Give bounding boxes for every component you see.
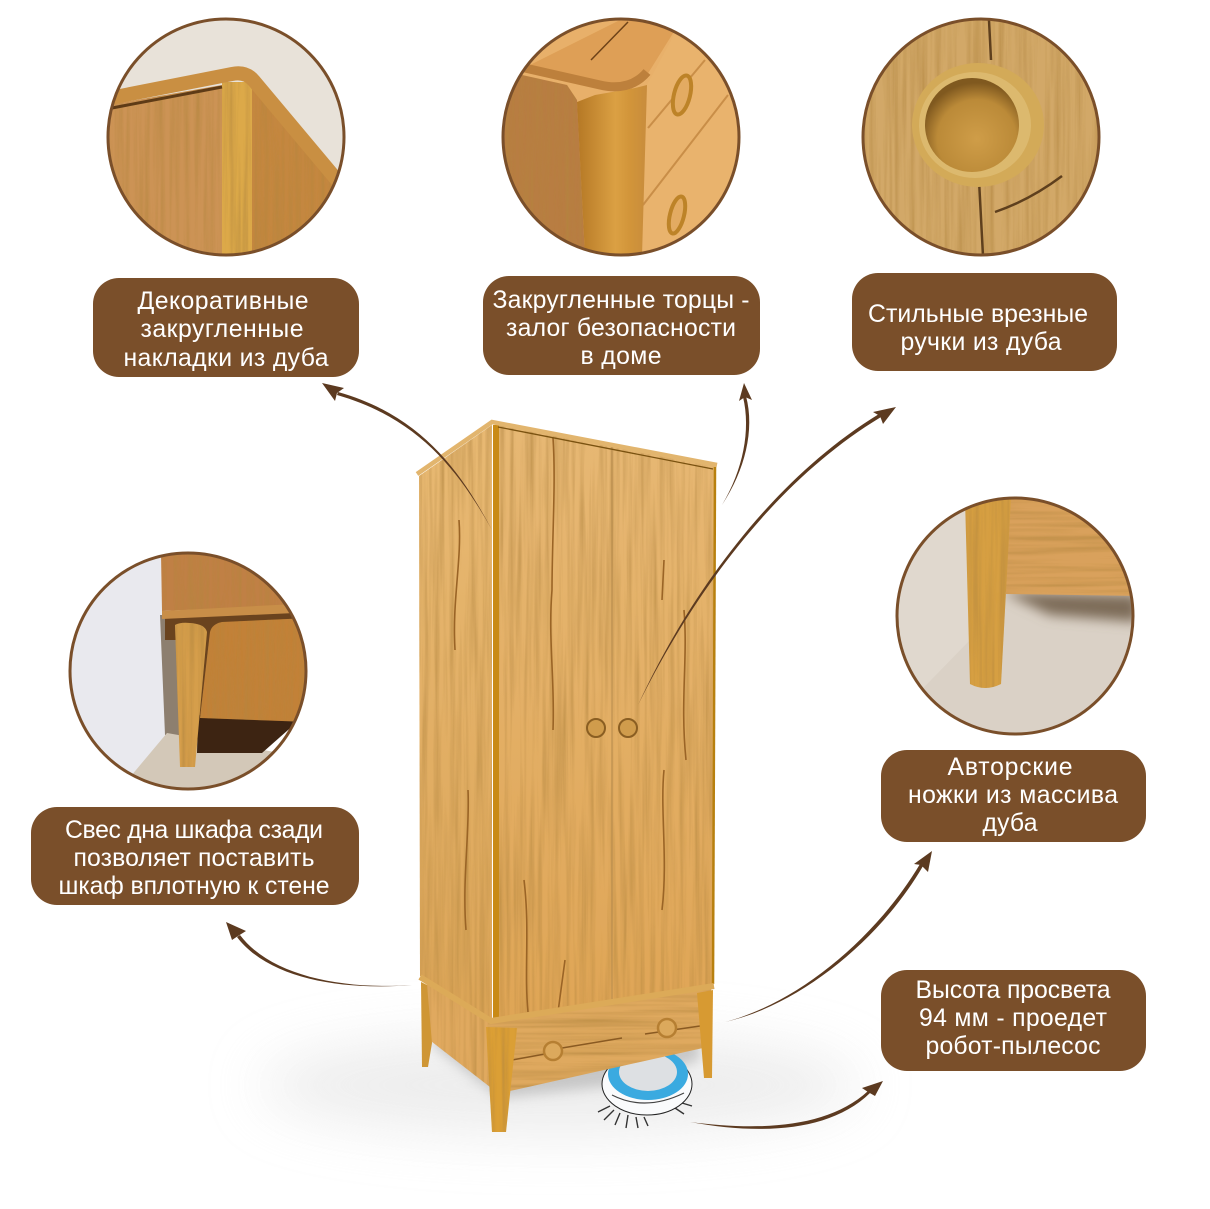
label: rear overhang: шкаф вплотную к стене bbox=[58, 873, 330, 900]
photo circle: rear overhang bbox=[72, 554, 304, 788]
door gap bbox=[611, 447, 613, 1000]
label: rounded edges: залог безопасности bbox=[506, 315, 736, 342]
label: handles: Стильные врезные bbox=[868, 301, 1088, 328]
photo circle: inset oak handle bbox=[860, 15, 1105, 260]
arrow: to legs label bbox=[725, 851, 932, 1022]
arrow: to handles label bbox=[638, 407, 896, 705]
label: legs: дуба bbox=[982, 810, 1038, 837]
photo circle: decorative oak overlays bbox=[110, 20, 342, 254]
label: legs: Авторские bbox=[948, 754, 1072, 781]
wardrobe side panel bbox=[419, 425, 492, 1020]
label: clearance: робот-пылесос bbox=[926, 1033, 1100, 1060]
door top shadow line bbox=[498, 427, 713, 469]
wardrobe drawer bbox=[488, 984, 712, 1092]
label: rounded edges: Закругленные торцы - bbox=[492, 287, 750, 314]
label: legs bbox=[881, 750, 1146, 842]
label: rounded edges: в доме bbox=[580, 343, 662, 370]
label: clearance: 94 мм - проедет bbox=[919, 1005, 1107, 1032]
label: decorative overlays: накладки из дуба bbox=[124, 345, 329, 372]
label: decorative overlays: закругленные bbox=[140, 316, 304, 343]
label: rear overhang: позволяет поставить bbox=[74, 845, 314, 872]
floor shadow bbox=[260, 1035, 860, 1135]
label: rear overhang: Свес дна шкафа сзади bbox=[65, 817, 323, 844]
arrow: to overhang label bbox=[226, 922, 412, 986]
label: handles bbox=[852, 273, 1117, 371]
wardrobe legs bbox=[421, 982, 432, 1067]
arrow: to overlays label bbox=[322, 383, 492, 530]
door frame post bbox=[493, 425, 499, 1020]
arrow: to clearance label bbox=[690, 1081, 883, 1129]
wardrobe bbox=[417, 422, 717, 1132]
door handles bbox=[587, 719, 605, 737]
label: clearance bbox=[881, 970, 1146, 1071]
label: handles: ручки из дуба bbox=[900, 329, 1062, 356]
wardrobe doors bbox=[497, 424, 715, 1020]
photo circle: oak legs bbox=[892, 495, 1138, 740]
arrow: to edges label bbox=[722, 383, 752, 505]
circle outlines bbox=[70, 19, 1133, 789]
label: decorative overlays: Декоративные bbox=[138, 288, 308, 315]
wardrobe right edge bbox=[713, 467, 715, 984]
photo circle: rounded edges bbox=[500, 15, 745, 260]
wardrobe contact shadow bbox=[432, 1020, 700, 1098]
wardrobe side lower panel bbox=[427, 982, 490, 1087]
label: decorative overlays bbox=[93, 278, 359, 377]
wood grain lines bbox=[454, 438, 686, 1012]
drawer handles bbox=[544, 1042, 562, 1060]
label: rear overhang bbox=[31, 807, 359, 905]
label: rounded edges bbox=[483, 276, 760, 375]
drawer crack lines bbox=[512, 1026, 700, 1060]
robot vacuum bbox=[598, 1048, 692, 1128]
label: legs: ножки из массива bbox=[908, 782, 1118, 809]
label: clearance: Высота просвета bbox=[916, 977, 1111, 1004]
wardrobe base band bbox=[420, 977, 714, 1021]
wardrobe top edge bbox=[417, 422, 717, 474]
